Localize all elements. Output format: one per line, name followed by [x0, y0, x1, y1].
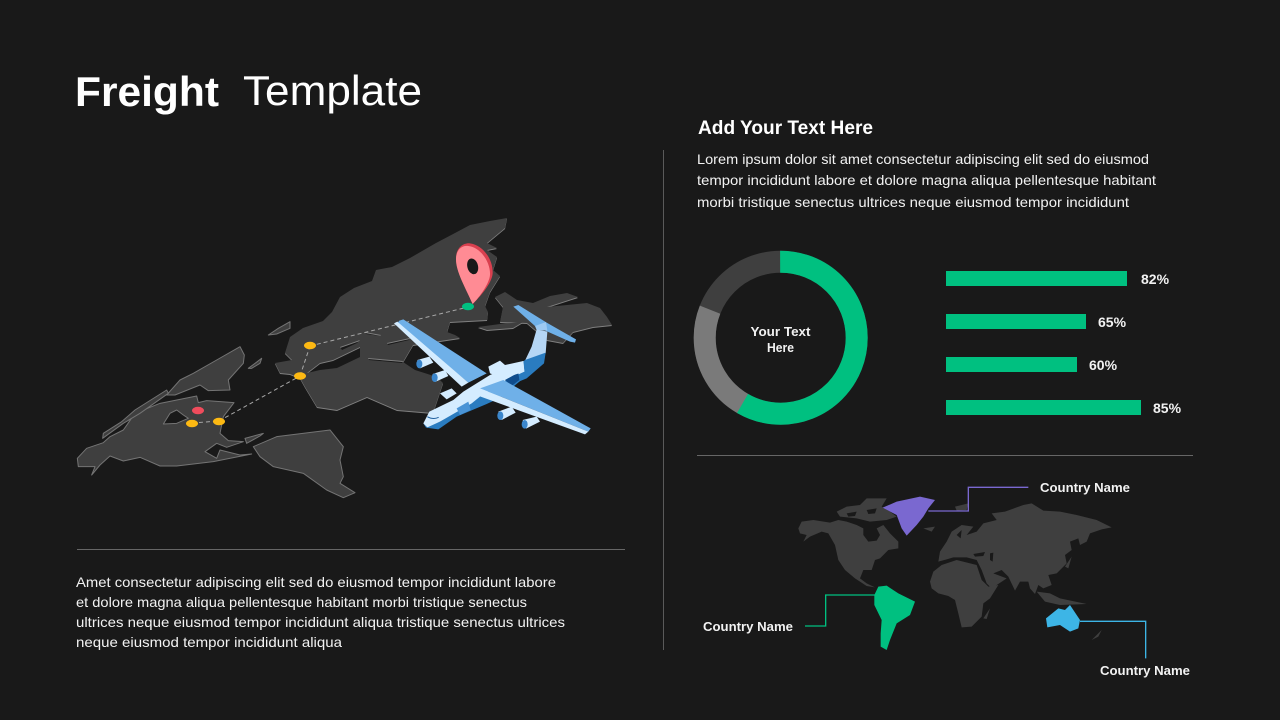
text block: upper right: Lorem ipsum dolor sit amet consectetur adipiscing elit sed do eiusmod	[697, 151, 1149, 167]
text block: lower left: neque eiusmod tempor incididunt aliqua	[76, 634, 342, 650]
bar chart	[946, 271, 1182, 416]
label: country name left: Country Name	[703, 620, 793, 634]
label: country name top: Country Name	[1040, 481, 1130, 495]
title: Freight	[75, 68, 219, 115]
isometric map: eastern landmass	[478, 292, 612, 343]
map highlight: australia	[1046, 605, 1146, 658]
icon: map pin	[456, 243, 493, 304]
title	[75, 67, 422, 115]
isometric map: americas	[77, 322, 355, 498]
map highlight: greenland	[883, 487, 1028, 536]
text block: lower left	[76, 574, 565, 650]
title: Template	[243, 67, 422, 114]
donut chart: Your Text	[750, 325, 811, 339]
location dots	[186, 303, 474, 427]
text block: upper right: morbi tristique senectus ultrices neque eiusmod tempor incididunt	[697, 194, 1129, 210]
text block: lower left: et dolore magna aliqua pellentesque habitant morbi tristique senectus	[76, 594, 527, 610]
text block: upper right	[697, 151, 1156, 210]
bar chart: 82%	[1141, 271, 1170, 287]
bar chart: 60%	[1089, 357, 1118, 373]
text block: lower left: Amet consectetur adipiscing elit sed do eiusmod tempor incididunt labore	[76, 574, 556, 590]
heading: add your text here: Add Your Text Here	[698, 118, 873, 139]
text block: lower left: ultrices neque eiusmod tempor incididunt aliqua tristique senectus ultrices	[76, 614, 565, 630]
icon: airplane	[394, 305, 591, 434]
route lines	[192, 307, 468, 423]
label: country name right: Country Name	[1100, 664, 1190, 678]
bar chart: 65%	[1098, 314, 1127, 330]
bar chart: 85%	[1153, 400, 1182, 416]
donut chart	[705, 262, 857, 414]
map highlight: south america	[805, 586, 915, 650]
donut chart: Here	[767, 341, 794, 355]
isometric map: eurasia and africa	[275, 218, 507, 413]
text block: upper right: tempor incididunt labore et dolore magna aliqua pellentesque habitant	[697, 172, 1156, 188]
world map	[798, 498, 1112, 640]
